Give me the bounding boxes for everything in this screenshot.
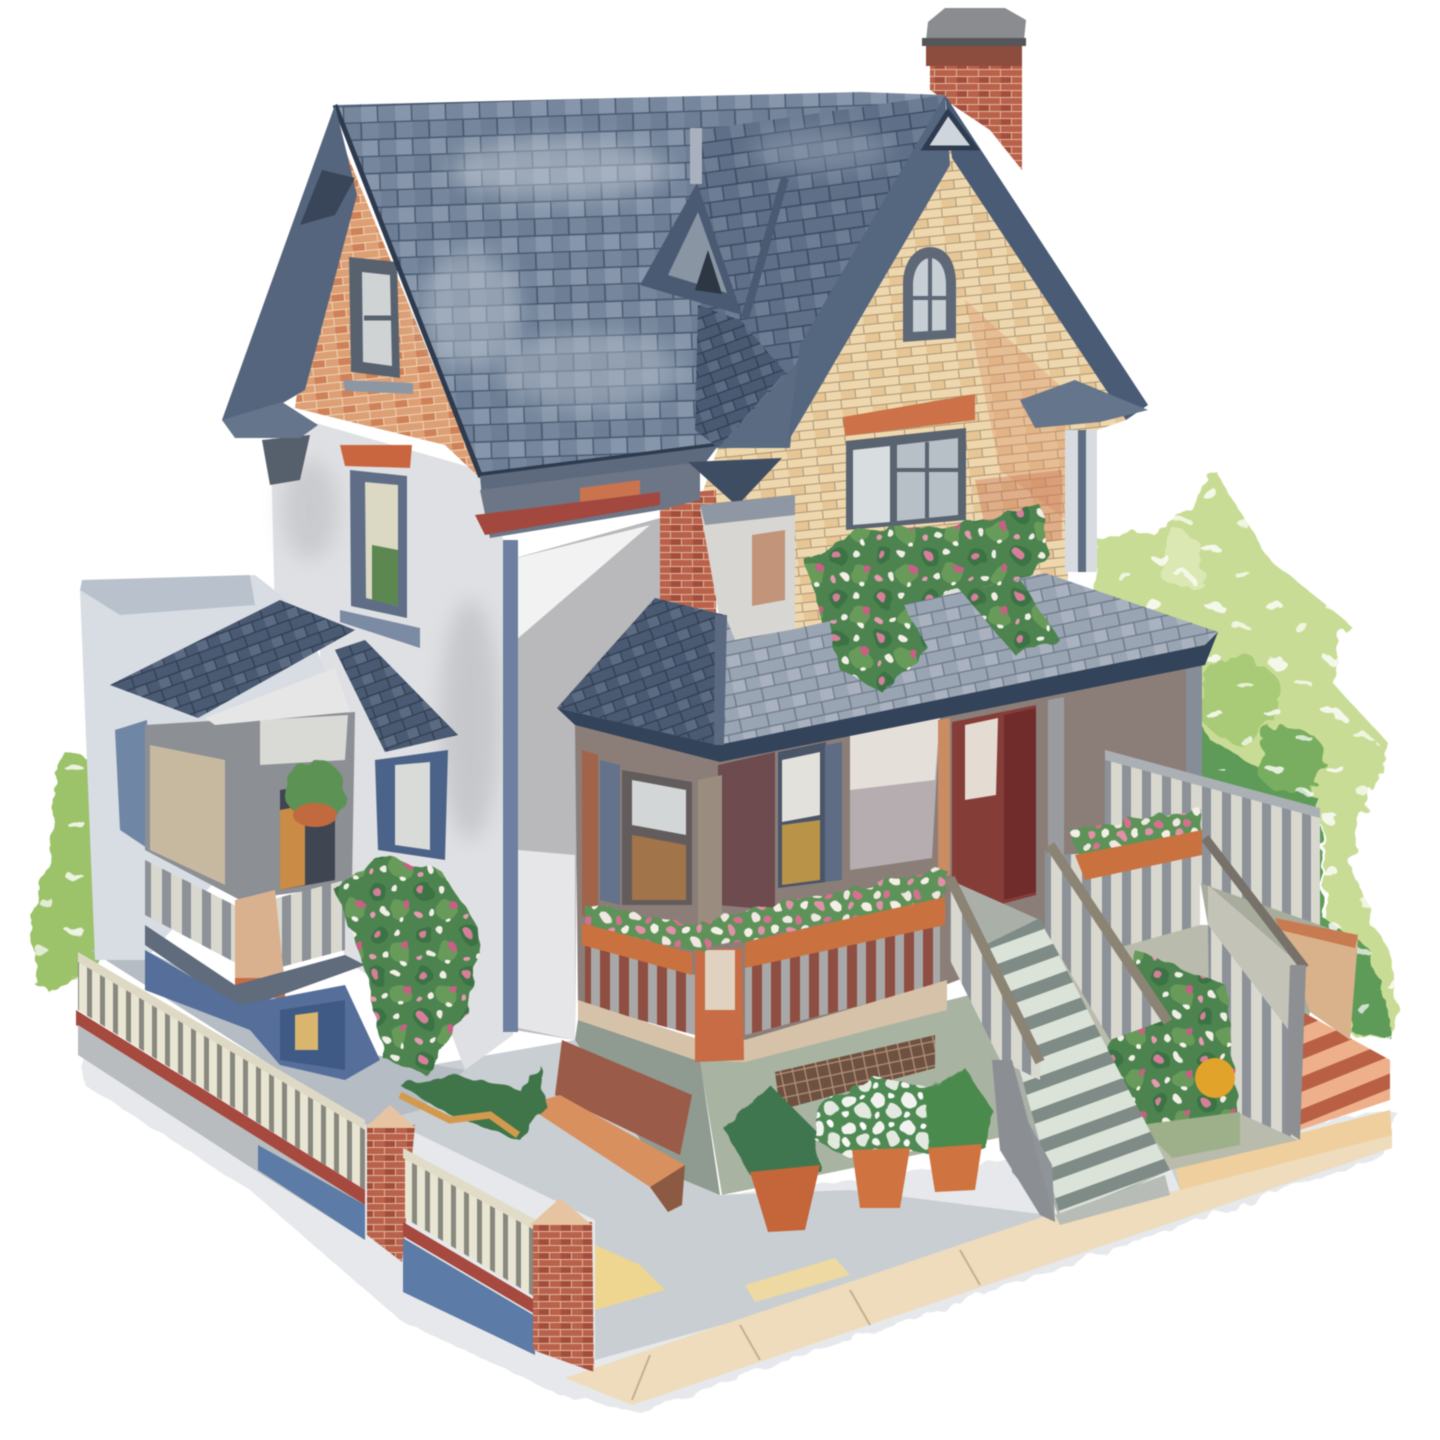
flowers spilling on roof <box>830 580 1060 690</box>
left fern and pot <box>725 1085 820 1232</box>
brick lintel <box>843 394 975 436</box>
right gable roof bands <box>788 95 1148 442</box>
left fence <box>76 952 365 1240</box>
small eave left <box>222 402 318 485</box>
wreath of flowers under upper window <box>805 505 1055 690</box>
main stairs <box>950 845 1170 1225</box>
plants beside stairs <box>1095 950 1240 1158</box>
back stairs <box>1175 880 1392 1190</box>
porch posts <box>582 665 1202 945</box>
porch roof <box>557 573 1218 762</box>
window boxes with flowers <box>582 868 945 975</box>
dormer <box>640 128 785 318</box>
potted plants <box>725 1068 992 1232</box>
right plant and pot <box>925 1068 992 1192</box>
porch railings <box>578 925 947 1062</box>
front door <box>952 705 1036 917</box>
lower fence <box>403 1148 540 1355</box>
chimney <box>922 8 1026 170</box>
attic side window <box>343 257 413 394</box>
right gable brick wall <box>700 140 1126 650</box>
ground behind left fence <box>90 950 465 1125</box>
upper front window <box>846 428 966 530</box>
garden border <box>400 1065 545 1140</box>
porch grey brick wall <box>850 716 940 870</box>
right brick gate post <box>530 1198 594 1372</box>
upper wall window <box>340 470 420 648</box>
tree: left foliage <box>30 745 135 990</box>
main slate roof <box>335 92 945 498</box>
wing roofs <box>110 600 355 718</box>
sidewalk curb <box>565 1130 1392 1405</box>
wing balcony <box>145 860 365 1010</box>
wing lower level <box>145 950 380 1080</box>
ground shadow <box>80 1050 1395 1412</box>
left gable brick wall <box>295 125 480 478</box>
porch structure <box>575 650 1202 1040</box>
valley <box>695 305 785 448</box>
stone column and gutter <box>688 458 795 650</box>
tree: right foliage <box>1095 470 1395 1040</box>
porch left window <box>622 770 692 905</box>
small eave right <box>1020 380 1148 572</box>
corner post <box>695 948 744 1062</box>
left gable roof band <box>222 105 357 425</box>
side wall <box>503 518 660 1040</box>
porch brick pier <box>718 752 775 910</box>
climbing rose bush <box>335 855 480 1075</box>
brick under eave and band <box>475 462 716 640</box>
right stair railing <box>1045 838 1306 1170</box>
roof edge outline <box>335 105 718 475</box>
white hydrangea and pot <box>815 1075 935 1208</box>
right porch railing and planter <box>1045 750 1320 950</box>
stucco front wall <box>270 410 513 1070</box>
arched attic window <box>903 247 956 342</box>
porch centre window <box>778 742 826 888</box>
bench <box>525 1040 692 1212</box>
left brick gate post <box>365 1105 416 1262</box>
side wing <box>80 575 458 960</box>
fascia below roof <box>480 446 718 498</box>
foundation <box>575 985 1012 1195</box>
paved walkway <box>345 1040 1300 1360</box>
hanging basket <box>285 760 345 827</box>
